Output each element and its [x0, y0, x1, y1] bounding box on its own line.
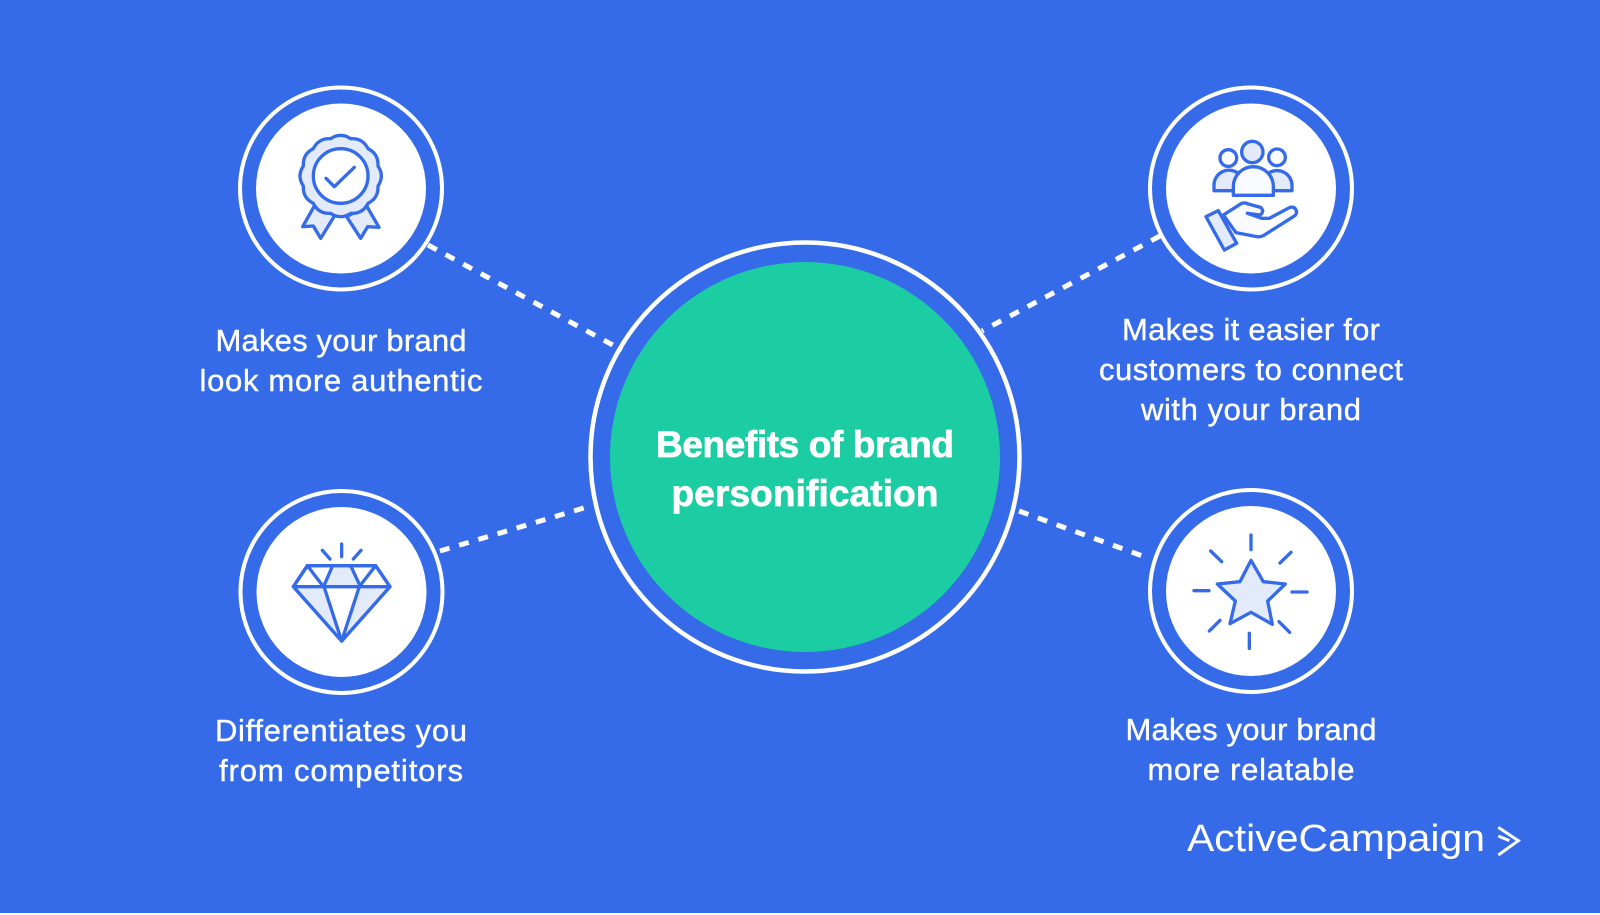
- icon: award rosette: [300, 135, 381, 238]
- label: connect: [1099, 312, 1403, 427]
- label: differentiates: [215, 713, 467, 788]
- label: differentiates: from competitors: [219, 753, 463, 788]
- label: connect: customers to connect: [1099, 352, 1403, 387]
- central heading: [656, 424, 954, 514]
- central heading: personification: [672, 473, 938, 514]
- panel: connect: [1099, 88, 1403, 427]
- central circle: [590, 242, 1020, 672]
- connector: top left: [428, 245, 622, 350]
- label: authentic: [200, 323, 482, 398]
- label: relatable: Makes your brand: [1126, 712, 1376, 747]
- central heading: Benefits of brand: [656, 424, 954, 465]
- connector: top right: [982, 236, 1160, 331]
- label: connect: Makes it easier for: [1122, 312, 1380, 347]
- label: relatable: more relatable: [1148, 752, 1354, 787]
- panel: authentic: [200, 88, 482, 398]
- label: relatable: [1126, 712, 1376, 787]
- label: authentic: look more authentic: [200, 363, 482, 398]
- logo: ActiveCampaign: ActiveCampaign: [1187, 818, 1485, 860]
- icon: people over hand: [1206, 141, 1297, 250]
- panel: differentiates: [215, 491, 467, 788]
- icon: diamond: [293, 544, 390, 641]
- connector: bottom left: [440, 507, 587, 551]
- panel: relatable: [1126, 490, 1376, 787]
- icon: star: [1194, 535, 1307, 648]
- connector: bottom right: [1019, 511, 1148, 558]
- label: authentic: Makes your brand: [216, 323, 466, 358]
- icon: logo chevron: [1498, 827, 1518, 855]
- label: connect: with your brand: [1140, 392, 1361, 427]
- label: differentiates: Differentiates you: [215, 713, 467, 748]
